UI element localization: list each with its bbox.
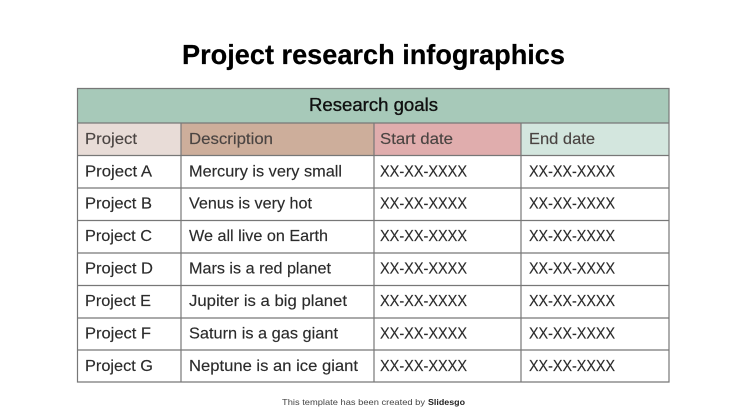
table: research goals bbox=[78, 88, 669, 382]
row: project A bbox=[85, 164, 615, 180]
table title banner: Research goals bbox=[309, 95, 438, 115]
column header: end date: End date bbox=[529, 131, 595, 148]
row: project G bbox=[85, 358, 615, 375]
row: project F: XX-XX-XXXX bbox=[380, 326, 467, 342]
row: project B: Venus is very hot bbox=[189, 196, 313, 212]
row: project D: Project D bbox=[85, 260, 153, 278]
row: project E: XX-XX-XXXX bbox=[380, 293, 467, 310]
row: project C: XX-XX-XXXX bbox=[529, 228, 615, 245]
table title banner bbox=[78, 88, 669, 123]
row: project B bbox=[85, 196, 615, 212]
row: project A: Project A bbox=[85, 164, 152, 180]
row: project F: XX-XX-XXXX bbox=[529, 326, 615, 342]
row: project D: Mars is a red planet bbox=[189, 260, 332, 278]
row: project E: Project E bbox=[85, 293, 151, 310]
row: project F bbox=[85, 326, 615, 342]
row: project A: XX-XX-XXXX bbox=[380, 164, 467, 180]
row: project C: Project C bbox=[85, 228, 152, 245]
row: project G: Neptune is an ice giant bbox=[189, 358, 359, 375]
column header: project bbox=[78, 123, 181, 156]
row: project G: XX-XX-XXXX bbox=[529, 358, 615, 375]
row: project G: XX-XX-XXXX bbox=[380, 358, 467, 375]
row: project B: Project B bbox=[85, 196, 152, 212]
column header: end date bbox=[521, 123, 669, 156]
row: project A: XX-XX-XXXX bbox=[529, 164, 615, 180]
row: project D bbox=[85, 260, 615, 278]
row: project E: XX-XX-XXXX bbox=[529, 293, 615, 310]
row: project C: XX-XX-XXXX bbox=[380, 228, 467, 245]
row: project C bbox=[85, 228, 615, 245]
footer credit: This template has been created by bbox=[282, 397, 426, 407]
footer credit: Slidesgo bbox=[428, 397, 465, 407]
row: project E bbox=[85, 293, 615, 310]
row: project A: Mercury is very small bbox=[189, 164, 342, 180]
row: project G: Project G bbox=[85, 358, 153, 375]
title: Project research infographics bbox=[182, 39, 565, 70]
column header: description: Description bbox=[189, 131, 273, 148]
row: project E: Jupiter is a big planet bbox=[189, 293, 348, 310]
row: project B: XX-XX-XXXX bbox=[380, 196, 467, 212]
row: project B: XX-XX-XXXX bbox=[529, 196, 615, 212]
column header: start date: Start date bbox=[380, 131, 453, 148]
column header: start date bbox=[374, 123, 521, 156]
row: project C: We all live on Earth bbox=[189, 228, 328, 245]
row: project D: XX-XX-XXXX bbox=[529, 260, 615, 278]
row: project F: Project F bbox=[85, 326, 151, 342]
row: project F: Saturn is a gas giant bbox=[189, 326, 339, 342]
row: project D: XX-XX-XXXX bbox=[380, 260, 467, 278]
column header: description bbox=[181, 123, 374, 156]
column header: project: Project bbox=[85, 131, 138, 148]
